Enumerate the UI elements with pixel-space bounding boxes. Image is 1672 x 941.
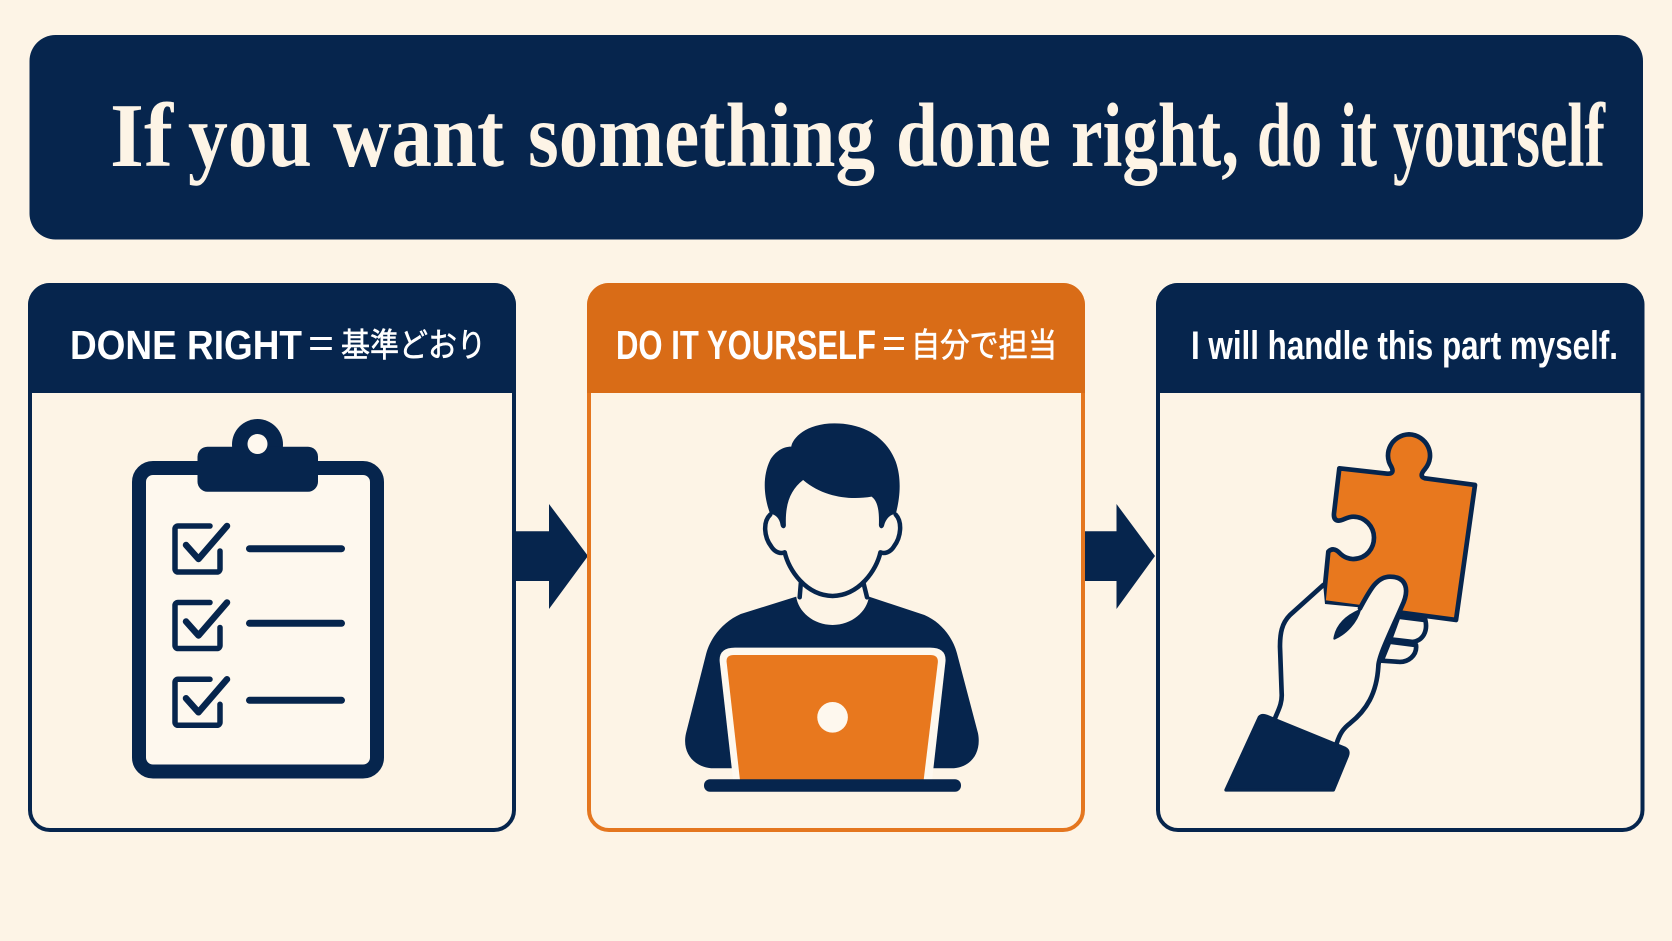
checklist row 3 bbox=[175, 679, 342, 725]
title text: done bbox=[896, 85, 1051, 186]
puzzle piece bbox=[1323, 434, 1475, 620]
title text: right, bbox=[1071, 85, 1239, 186]
arrow: do it yourself to handle it bbox=[1085, 504, 1155, 609]
thumb crease bbox=[1334, 610, 1360, 639]
panel header: done right: DONE RIGHT bbox=[70, 322, 302, 368]
title text: it bbox=[1340, 85, 1377, 186]
panel header: do it yourself: 自分で担当 bbox=[911, 326, 1057, 364]
panel header: do it yourself: = bbox=[882, 320, 906, 366]
title banner bbox=[30, 35, 1643, 240]
shirt bbox=[685, 597, 979, 768]
checklist row 2 bbox=[175, 602, 342, 648]
panel header: done right: 基準どおり bbox=[341, 326, 486, 364]
icon: person with laptop bbox=[685, 423, 979, 792]
laptop bbox=[720, 648, 946, 780]
panel: done right bbox=[28, 283, 516, 830]
hand outline bbox=[1275, 577, 1406, 743]
panel header: do it yourself: DO IT YOURSELF bbox=[616, 322, 876, 368]
arrow: done right to do it yourself bbox=[516, 504, 588, 609]
panel header: do it yourself bbox=[587, 283, 1085, 393]
title text: do bbox=[1257, 85, 1322, 186]
icon: hand holding puzzle piece bbox=[1226, 434, 1475, 790]
fingers behind puzzle bbox=[1382, 617, 1426, 662]
hair bbox=[765, 423, 900, 528]
title text: want bbox=[333, 85, 504, 186]
panel: I will handle this part myself bbox=[1156, 283, 1644, 830]
checklist row 1 bbox=[175, 526, 342, 572]
title text: If bbox=[110, 85, 175, 186]
icon: clipboard checklist bbox=[139, 419, 377, 772]
panel header: done right: = bbox=[308, 320, 334, 366]
title text bbox=[110, 85, 1606, 186]
face and ears outline bbox=[765, 515, 900, 597]
title text: something bbox=[528, 85, 875, 186]
sleeve bbox=[1226, 716, 1348, 790]
panel: do it yourself bbox=[587, 283, 1085, 830]
title text: you bbox=[188, 85, 312, 186]
panel header: done right bbox=[28, 283, 516, 393]
panel header: handle it bbox=[1156, 283, 1644, 393]
hand fill bbox=[1275, 577, 1406, 743]
